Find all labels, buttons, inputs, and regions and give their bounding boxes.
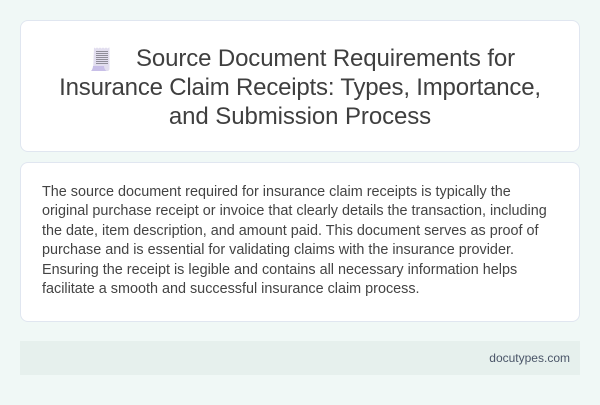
description text: facilitate a smooth and successful insurance claim process. (42, 281, 420, 297)
footer bar (20, 341, 580, 375)
footer source label: docutypes.com (489, 351, 570, 365)
panel: title card (20, 20, 580, 152)
title heading: and Submission Process (169, 103, 431, 130)
panel: description card (20, 162, 580, 322)
title heading: Insurance Claim Receipts: Types, Importance, (59, 74, 541, 101)
title heading (59, 45, 541, 130)
icon: receipt document (91, 48, 110, 71)
description text: purchase and is essential for validating claims with the insurance provider. (42, 242, 514, 258)
description text: the date, item description, and amount paid. This document serves as proof of (42, 223, 538, 239)
description text: The source document required for insurance claim receipts is typically the (42, 184, 511, 200)
description text: Ensuring the receipt is legible and contains all necessary information helps (42, 262, 517, 278)
description text: original purchase receipt or invoice that clearly details the transaction, including (42, 203, 547, 219)
description text (42, 184, 547, 297)
title heading: Source Document Requirements for (136, 45, 515, 72)
